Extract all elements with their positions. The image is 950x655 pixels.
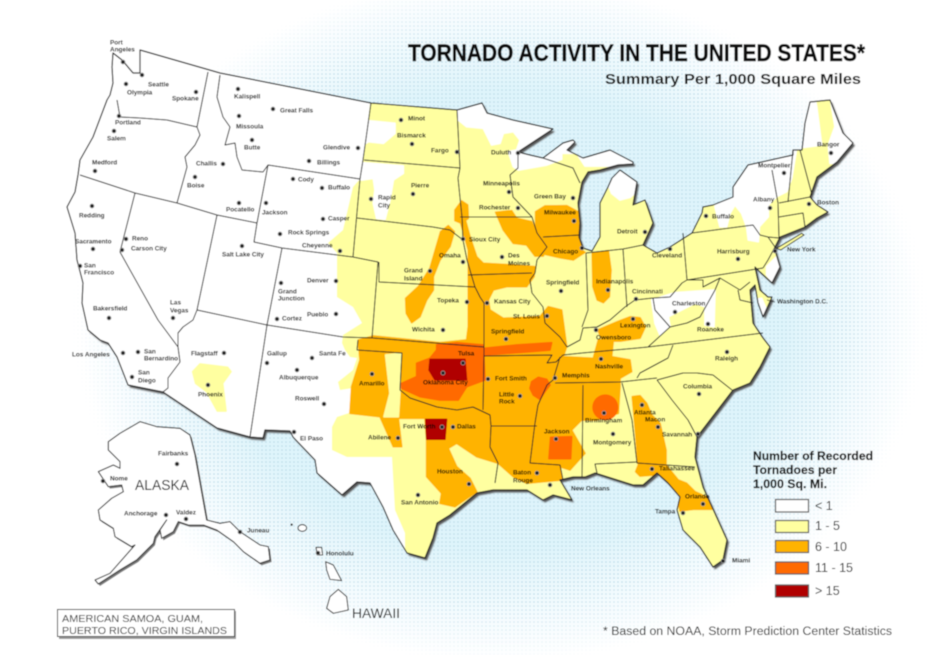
city labels: central and east: Tulsa	[458, 350, 475, 358]
city labels: west: Buffalo	[328, 184, 350, 192]
legend item: 11-15	[776, 561, 853, 575]
city labels: west: Salt Lake City	[222, 252, 264, 258]
city labels: central and east: Tampa	[655, 508, 676, 516]
footnote: * Based on NOAA, Storm Prediction Center Statistics	[603, 626, 892, 638]
city labels: central and east	[110, 116, 840, 564]
zone: 11-15 Birmingham	[592, 394, 618, 420]
city labels: central and east: Raleigh	[715, 356, 738, 362]
city labels: west: Los Angeles	[72, 352, 110, 358]
city labels: west: Cody	[298, 176, 314, 184]
city labels: central and east: Macon	[645, 416, 665, 424]
city labels: west	[72, 40, 350, 442]
city labels: west: Portland	[115, 120, 141, 126]
city labels: central and east: Island	[404, 276, 423, 282]
city labels: central and east: Fairbanks	[158, 450, 189, 458]
city labels: central and east: Little	[499, 392, 515, 398]
city labels: central and east: Savannah	[662, 432, 692, 438]
legend	[753, 449, 873, 598]
city labels: west: Roswell	[295, 396, 319, 402]
city labels: central and east: Springfield	[491, 328, 524, 336]
zone: 11-15 Oklahoma	[402, 343, 485, 400]
city labels: central and east: Juneau	[247, 528, 269, 534]
city labels: west: Las	[170, 300, 181, 306]
legend item: over 15: > 15	[815, 584, 840, 598]
tornado frequency zones	[193, 90, 900, 600]
city labels: west: Gallup	[267, 350, 287, 358]
city labels: west: Vegas	[170, 308, 189, 314]
city labels: central and east: Columbia	[683, 384, 713, 390]
legend title	[753, 449, 873, 491]
city labels: central and east: Dallas	[457, 424, 476, 430]
city labels: central and east: Baton	[513, 470, 531, 476]
city labels: west: Bernardino	[144, 356, 178, 362]
territories box: PUERTO RICO, VIRGIN ISLANDS	[62, 626, 227, 637]
city labels: central and east: Memphis	[562, 372, 590, 380]
city labels: central and east: Buffalo	[712, 214, 734, 220]
city labels: central and east: Rock	[499, 398, 515, 406]
city markers	[78, 60, 833, 563]
city labels: west: El Paso	[300, 436, 323, 442]
city labels: central and east: Green Bay	[534, 194, 566, 200]
city labels: central and east: Bismarck	[397, 132, 426, 140]
legend title: Number of Recorded	[753, 449, 873, 463]
city labels: west: San	[138, 370, 150, 376]
city labels: central and east: Detroit	[617, 228, 638, 236]
city labels: central and east: Chicago	[553, 248, 578, 256]
city labels: central and east: Owensboro	[596, 334, 631, 342]
city labels: central and east: Moines	[508, 260, 530, 268]
label: Alaska: ALASKA	[135, 477, 189, 494]
city labels: west: Junction	[278, 296, 305, 302]
city labels: west: Boise	[187, 182, 205, 190]
Washington D.C. leader line	[767, 300, 775, 302]
city labels: west: Flagstaff	[191, 350, 219, 358]
city labels: west: Santa Fe	[319, 350, 346, 358]
city labels: west: Spokane	[172, 96, 199, 102]
legend item: 6-10	[776, 540, 847, 554]
zones: south-central severity bands	[350, 218, 632, 507]
city labels: central and east: Minneapolis	[483, 180, 520, 188]
city labels: central and east: Fort Smith	[495, 376, 527, 382]
city labels: central and east: St. Louis	[513, 314, 540, 320]
city labels: central and east: Wichita	[412, 326, 435, 334]
legend item: 1-5: 1 - 5	[815, 519, 840, 533]
city labels: central and east: Des	[508, 252, 520, 260]
zones: 6-10 orange, upper midwest	[406, 201, 611, 323]
Long Island	[777, 233, 804, 250]
city labels: west: Redding	[79, 212, 105, 220]
city labels: west: Salem	[107, 136, 126, 142]
city labels: central and east: Rochester	[479, 204, 511, 212]
city labels: west: Pueblo	[307, 312, 328, 318]
city labels: central and east: Pierre	[411, 182, 430, 190]
city labels: central and east: Fargo	[431, 148, 449, 154]
city labels: central and east: Harrisburg	[717, 248, 750, 256]
subtitle: Summary Per 1,000 Square Miles	[605, 71, 861, 88]
zone: 1-5 Arizona	[193, 364, 231, 411]
city labels: central and east: Sioux City	[469, 236, 501, 244]
city labels: central and east: Honolulu	[326, 550, 354, 558]
city labels: west: Bakersfield	[93, 306, 128, 312]
city labels: west: Pocatello	[226, 206, 255, 214]
Alaska	[95, 422, 272, 586]
city labels: central and east: San Antonio	[401, 500, 438, 506]
city labels: central and east: Jackson	[544, 428, 570, 436]
city labels: central and east: Indianapolis	[596, 278, 634, 286]
city labels: west: Cortez	[282, 316, 302, 322]
city labels: west: Seattle	[148, 82, 169, 88]
city labels: central and east: Roanoke	[697, 326, 724, 334]
city labels: central and east: Orlando	[685, 494, 710, 500]
contiguous United States land	[67, 50, 853, 567]
city labels: central and east: Montgomery	[593, 440, 632, 446]
zone: 6-10 central corridor	[350, 218, 632, 507]
city labels: central and east: Rouge	[513, 478, 533, 484]
city labels: central and east: Tallahassee	[659, 466, 695, 472]
city labels: central and east: Springfield	[546, 280, 579, 286]
city labels: central and east: Bangor	[817, 142, 840, 148]
city labels: west: Cheyenne	[302, 242, 333, 250]
city labels: west: Medford	[92, 160, 117, 166]
legend item: 11-15: 11 - 15	[815, 561, 853, 575]
city labels: west: Missoula	[236, 124, 264, 130]
city labels: west: Casper	[328, 216, 350, 222]
city labels: central and east: Charleston	[672, 300, 705, 308]
city labels: west: Albuquerque	[279, 374, 319, 382]
legend item: 1-5	[776, 519, 840, 533]
city labels: west: Kalispell	[234, 94, 261, 100]
territories box	[58, 610, 236, 639]
city labels: west: Phoenix	[198, 392, 223, 398]
city labels: west: San	[144, 348, 156, 356]
city labels: west: Diego	[138, 378, 156, 384]
city labels: central and east: Nashville	[595, 364, 624, 370]
legend item: over 15	[776, 584, 840, 598]
city labels: central and east: Fort Worth	[403, 424, 436, 430]
city labels: central and east: Boston	[817, 200, 839, 206]
national outline	[67, 50, 853, 567]
city labels: central and east: Rapid	[378, 194, 396, 202]
city labels: central and east: Lexington	[620, 322, 651, 330]
city labels: west: Carson City	[131, 246, 167, 252]
city labels: west: Rock Springs	[288, 230, 330, 236]
legend title: Tornadoes per	[753, 463, 837, 477]
city labels: central and east: Cincinnati	[632, 288, 663, 296]
city labels: west: Great Falls	[280, 108, 313, 114]
zone: over 15 Fort Worth	[426, 419, 447, 439]
legend item: under 1	[776, 499, 833, 513]
city labels: central and east: Grand	[404, 268, 423, 274]
city labels: central and east: Nome	[110, 476, 128, 482]
city labels: central and east: Albany	[753, 196, 775, 204]
city labels: west: Butte	[244, 144, 261, 152]
legend item: under 1: < 1	[815, 499, 833, 513]
city labels: central and east: New York	[787, 246, 816, 254]
city labels: central and east: Minot	[408, 116, 426, 122]
state boundaries	[80, 72, 812, 483]
city labels: central and east: Topeka	[437, 298, 459, 304]
city labels: central and east: Houston	[437, 468, 463, 476]
city labels: central and east: Valdez	[176, 510, 196, 516]
zones: under 1 white patches, north-central	[350, 97, 640, 219]
city labels: central and east: Omaha	[439, 252, 461, 260]
city labels: west: Denver	[307, 278, 329, 284]
zone: 6-10 Georgia and Florida	[632, 396, 713, 511]
Hawaii islands	[291, 524, 348, 613]
city labels: west: Jackson	[262, 210, 288, 216]
city labels: central and east: Milwaukee	[544, 210, 576, 216]
city labels: west: Reno	[132, 236, 148, 242]
city labels: west: Angeles	[110, 46, 135, 54]
legend title: 1,000 Sq. Mi.	[753, 477, 827, 491]
city labels: west: Billings	[317, 160, 341, 166]
city labels: west: Port	[110, 40, 124, 46]
city labels: west: Challis	[196, 160, 217, 168]
title: TORNADO ACTIVITY IN THE UNITED STATES*	[408, 40, 866, 67]
label: Hawaii: HAWAII	[352, 605, 400, 621]
zone: 1-5 yellow base	[328, 100, 834, 567]
zone: 6-10 Kentucky	[598, 317, 645, 341]
city labels: central and east: Birmingham	[585, 418, 623, 424]
city labels: west: Francisco	[84, 270, 114, 276]
city labels: central and east: Washington D.C.	[777, 298, 828, 306]
city labels: west: Grand	[278, 288, 297, 296]
legend item: 6-10: 6 - 10	[815, 540, 847, 554]
city labels: central and east: Miami	[732, 558, 750, 564]
city labels: central and east: Montpelier	[758, 162, 791, 170]
map shadow	[69, 52, 855, 570]
zone: over 15 Oklahoma City to Tulsa	[429, 359, 467, 380]
city labels: central and east: Atlanta	[634, 410, 656, 416]
city labels: central and east: City	[378, 202, 391, 210]
zone: 1-5 Texas panhandle strip	[384, 353, 401, 417]
zone: 11-15 Arkansas	[530, 377, 550, 399]
city labels: west: Olympia	[127, 90, 153, 96]
city labels: central and east: Kansas City	[494, 298, 531, 306]
city labels: central and east: Abilene	[368, 434, 392, 442]
city labels: central and east: Amarillo	[359, 380, 385, 388]
zone: 11-15 Missouri band	[484, 343, 552, 355]
city labels: central and east: New Orleans	[571, 486, 610, 492]
city labels: west: San	[84, 262, 96, 270]
city labels: west: Sacramento	[75, 238, 112, 246]
zone: 11-15 Jackson	[549, 437, 572, 459]
territories box: AMERICAN SAMOA, GUAM,	[62, 614, 203, 625]
city labels: central and east: Duluth	[491, 150, 511, 156]
city labels: central and east: Cleveland	[652, 252, 682, 260]
city labels: west: Glendive	[323, 144, 350, 152]
zones: under 1 white patches, northeast	[652, 90, 860, 335]
city labels: central and east: Oklahoma City	[423, 380, 468, 386]
city labels: central and east: Anchorage	[124, 510, 158, 518]
